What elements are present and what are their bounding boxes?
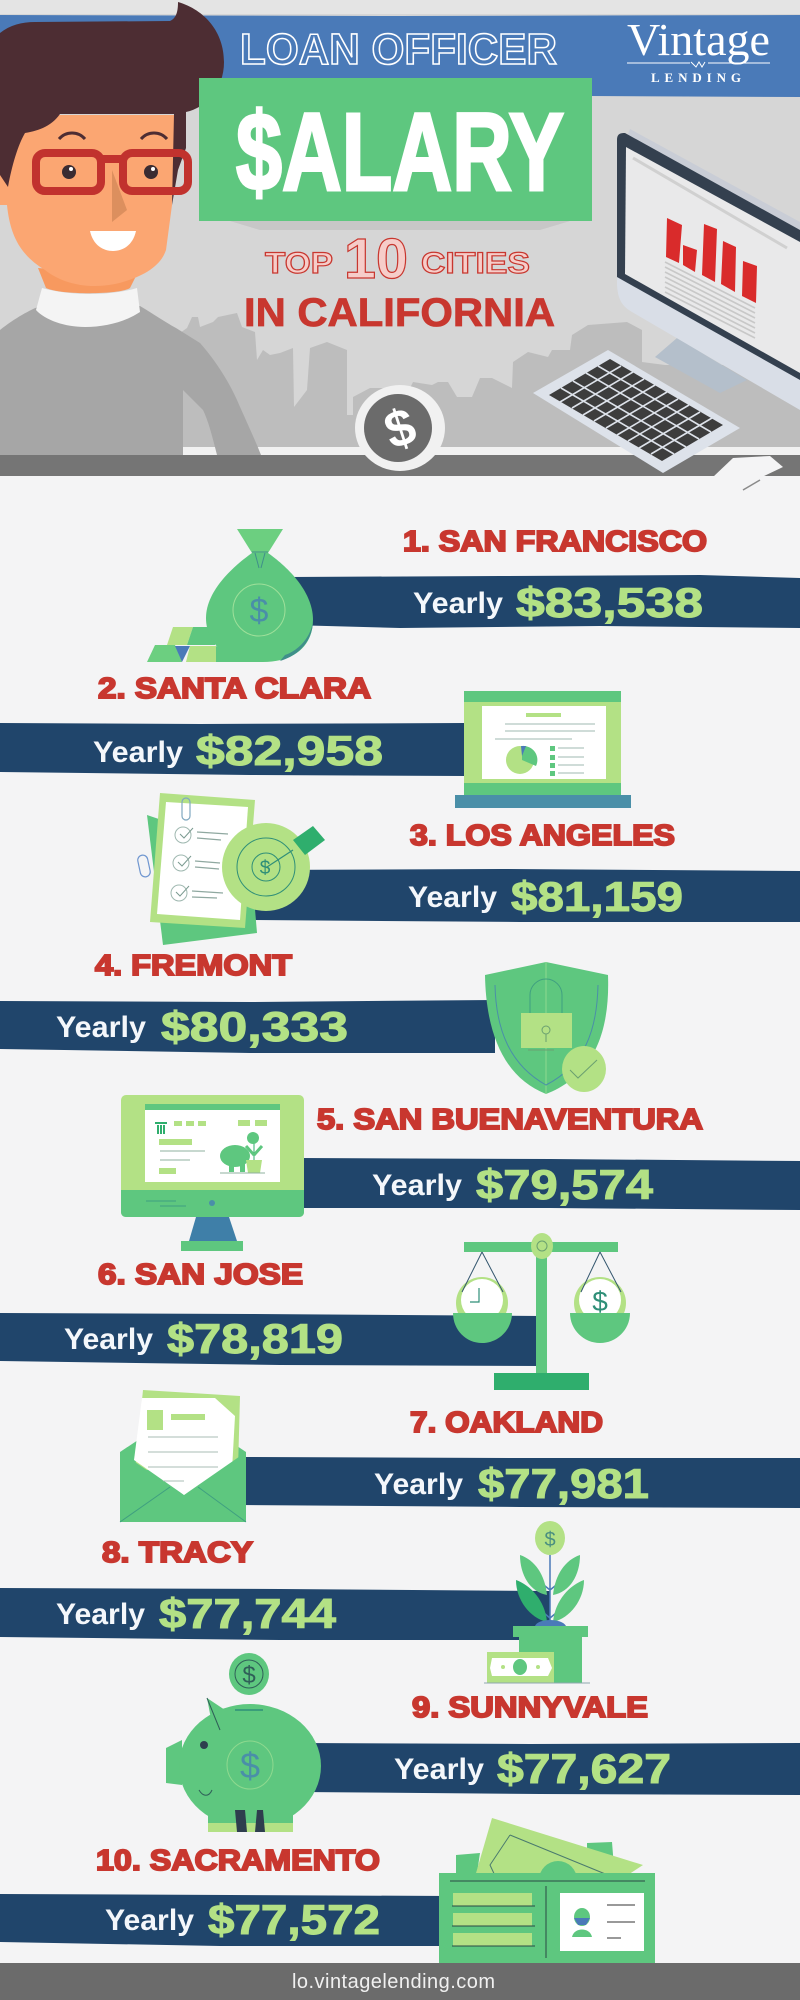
city name: 5. SAN BUENAVENTURA xyxy=(317,1104,703,1136)
heading: top 10 cities: CITIES xyxy=(421,247,530,280)
blue title band xyxy=(0,15,800,97)
loan officer character xyxy=(0,2,261,455)
eyebrows xyxy=(59,133,167,139)
row 10: Sacramento xyxy=(0,1818,655,1963)
yearly label: Yearly xyxy=(408,881,497,914)
icon: dollar coin: $ xyxy=(378,397,423,461)
sweater xyxy=(0,306,261,455)
row 2: Santa Clara xyxy=(0,673,631,808)
row 4: Fremont xyxy=(0,950,608,1094)
city name: 2. SANTA CLARA xyxy=(98,673,371,705)
yearly label: Yearly xyxy=(372,1169,462,1202)
row 5: San Buenaventura xyxy=(121,1095,800,1251)
icon: envelope with letter xyxy=(120,1390,246,1522)
city name: 10. SACRAMENTO xyxy=(96,1845,380,1877)
hair xyxy=(0,2,224,205)
footer xyxy=(0,1963,800,2000)
icon: wallet with cash xyxy=(439,1818,655,1963)
smile xyxy=(90,231,136,251)
salary bar xyxy=(290,575,800,628)
eyes xyxy=(62,165,158,179)
salary amount: $77,627 xyxy=(497,1745,671,1792)
city name: 6. SAN JOSE xyxy=(98,1259,303,1291)
heading: top 10 cities: 10 xyxy=(344,227,408,291)
salary bar xyxy=(240,1457,800,1508)
salary amount: $80,333 xyxy=(161,1003,348,1050)
icon: piggy bank: $ xyxy=(242,1662,256,1689)
salary bar xyxy=(0,1894,450,1946)
salary amount: $77,744 xyxy=(159,1590,337,1637)
heading: in california: IN CALIFORNIA xyxy=(244,291,555,335)
mouse xyxy=(713,456,783,490)
icon: piggy bank: $ xyxy=(240,1745,260,1786)
logo: Vintage Lending: Vintage xyxy=(627,14,770,65)
collar xyxy=(36,288,140,327)
icon: piggy bank xyxy=(166,1653,321,1832)
panel: header scene xyxy=(0,0,800,490)
salary bar xyxy=(0,1588,550,1640)
yearly label: Yearly xyxy=(105,1904,194,1937)
icon: desktop with piggy bank xyxy=(121,1095,304,1251)
salary amount: $82,958 xyxy=(196,727,383,774)
icon: clipboard and target xyxy=(137,793,325,945)
icon: balance scale xyxy=(453,1233,630,1390)
row 6: San Jose xyxy=(0,1233,630,1390)
salary bar xyxy=(0,1313,540,1366)
desk xyxy=(0,447,800,476)
icon: clipboard and target: $ xyxy=(260,858,271,879)
yearly label: Yearly xyxy=(56,1598,145,1631)
city name: 9. SUNNYVALE xyxy=(412,1692,648,1724)
salary bar xyxy=(250,869,800,922)
icon: money plant: $ xyxy=(544,1529,556,1551)
city name: 3. LOS ANGELES xyxy=(410,820,675,852)
nose xyxy=(112,170,127,222)
city name: 4. FREMONT xyxy=(95,950,292,982)
website url: lo.vintagelending.com xyxy=(292,1971,495,1993)
city name: 8. TRACY xyxy=(102,1537,253,1569)
heading: top 10 cities xyxy=(265,227,530,291)
row 8: Tracy xyxy=(0,1521,590,1683)
yearly label: Yearly xyxy=(413,587,503,620)
icon: money plant xyxy=(484,1521,590,1683)
row 9: Sunnyvale xyxy=(166,1653,800,1832)
row 7: Oakland xyxy=(120,1390,800,1522)
salary amount: $77,572 xyxy=(208,1896,380,1943)
heading: loan officer: LOAN OFFICER xyxy=(240,25,557,74)
yearly label: Yearly xyxy=(93,736,183,769)
icon: laptop chart xyxy=(455,691,631,808)
row 3: Los Angeles xyxy=(137,793,800,945)
keyboard xyxy=(533,350,740,473)
yearly label: Yearly xyxy=(374,1468,463,1501)
salary bar xyxy=(0,723,465,776)
city skyline xyxy=(170,313,800,448)
icon: balance scale: $ xyxy=(592,1286,608,1317)
salary bar xyxy=(0,1000,495,1053)
salary amount: $77,981 xyxy=(478,1460,649,1507)
glasses xyxy=(36,153,188,191)
heading: salary: $ALARY xyxy=(236,91,564,214)
heading: top 10 cities: TOP xyxy=(265,247,333,280)
neck xyxy=(38,268,136,293)
face xyxy=(0,115,175,286)
heading: salary xyxy=(199,78,592,230)
yearly label: Yearly xyxy=(64,1323,153,1356)
logo: Vintage Lending: LENDING xyxy=(651,70,741,85)
computer monitor xyxy=(617,129,800,410)
yearly label: Yearly xyxy=(56,1011,146,1044)
salary amount: $83,538 xyxy=(516,579,703,626)
salary amount: $79,574 xyxy=(476,1161,654,1208)
icon: shield with lock xyxy=(485,962,608,1094)
salary bar xyxy=(300,1743,800,1795)
salary amount: $78,819 xyxy=(167,1315,343,1362)
row 1: San Francisco xyxy=(147,526,800,662)
icon: money bag xyxy=(147,529,313,662)
city name: 1. SAN FRANCISCO xyxy=(403,526,707,558)
city name: 7. OAKLAND xyxy=(410,1407,603,1439)
salary amount: $81,159 xyxy=(511,873,683,920)
icon: money bag: $ xyxy=(250,592,269,630)
salary bar xyxy=(300,1158,800,1210)
icon: dollar coin xyxy=(355,385,445,471)
yearly label: Yearly xyxy=(394,1753,484,1786)
bar chart on screen xyxy=(666,218,757,303)
